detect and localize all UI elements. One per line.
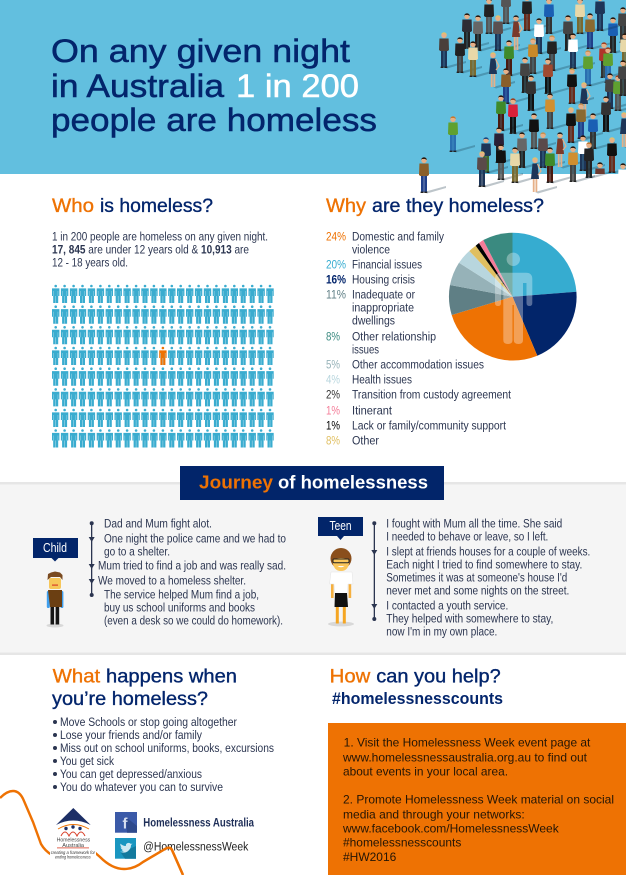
panel: who is homeless (52, 196, 274, 448)
text block: teen story: never met and some nights on the street. (386, 583, 569, 597)
legend: reasons with percentages: Other accommodation issues (352, 358, 484, 372)
panel: child journey (33, 516, 286, 628)
title (51, 33, 377, 138)
text block: teen story: I needed to behave or leave, so I left. (386, 529, 548, 543)
callout: orange action box: about events in your local area. (343, 765, 508, 779)
text: HomelessnessWeek handle: @HomelessnessWeek (143, 842, 249, 854)
chart: pie of homelessness reasons with person overlay (449, 233, 577, 361)
arrow timeline: teen (371, 521, 377, 621)
legend: reasons with percentages: Domestic and family (352, 230, 445, 244)
heading: why are they homeless: Why (326, 196, 367, 217)
list: consequences (53, 715, 274, 794)
legend: reasons with percentages: Health issues (352, 373, 412, 387)
text block: who statistics: 17, 845 are under 12 years old & 10,913 are (52, 243, 249, 257)
legend: reasons with percentages: Inadequate or (352, 288, 415, 302)
heading: how can you help (330, 667, 501, 688)
text: Homelessness Australia: Homelessness Australia (143, 818, 254, 830)
label tag: teen: Teen (330, 519, 352, 533)
callout: orange action box: 1. Visit the Homelessness Week event page at (344, 736, 591, 750)
heading: journey of homelessness banner (180, 466, 444, 500)
text block: teen story: I fought with Mum all the time. She said (386, 516, 562, 530)
text block: teen story: I contacted a youth service. (386, 598, 508, 612)
legend: reasons with percentages: violence (352, 243, 390, 257)
title: 1 in 200 (236, 68, 359, 104)
heading: journey of homelessness banner: Journey (199, 472, 274, 492)
label tag: teen (318, 517, 363, 540)
legend: reasons with percentages: 11% (326, 288, 346, 302)
legend: reasons with percentages: inappropriate (352, 301, 414, 315)
text block: child story (98, 516, 286, 628)
panel: how can you help (328, 667, 626, 875)
text block: teen story: Each night I tried to find somewhere to stay. (386, 557, 582, 571)
logo: Homelessness Australia: Australia (62, 843, 85, 849)
logo: Homelessness Australia (50, 806, 96, 861)
legend: reasons with percentages: 4% (326, 373, 340, 387)
callout: orange action box (328, 723, 626, 875)
callout: orange action box: media and through your networks: (343, 807, 525, 821)
legend: reasons with percentages: 1% (326, 404, 340, 418)
title: people are homeless (51, 102, 377, 138)
legend: reasons with percentages: 8% (326, 329, 340, 343)
legend: reasons with percentages: issues (352, 343, 379, 357)
icon: twitter (115, 838, 136, 859)
icon: facebook: f (122, 816, 128, 832)
heading: what happens: What (53, 667, 101, 688)
icon: translucent person (495, 253, 532, 344)
callout: orange action box: #homelessnesscounts (343, 836, 461, 850)
text block: child story: We moved to a homeless shelter. (98, 573, 246, 587)
logo: Homelessness Australia: ending homelessness (55, 854, 91, 859)
heading: why are they homeless: are they homeless? (372, 196, 544, 217)
legend: reasons with percentages (326, 230, 512, 448)
label tag: child: Child (43, 541, 67, 555)
icon: facebook (115, 812, 137, 833)
panel: journey of homelessness background (0, 482, 626, 655)
hashtag: homelessnesscounts: #homelessnesscounts (332, 690, 503, 708)
label tag: child (33, 538, 78, 562)
curve segment over handle (143, 848, 183, 875)
text block: teen story: They helped with somewhere to stay, (386, 611, 553, 625)
text block: child story: Mum tried to find a job and was really sad. (98, 558, 286, 572)
text block: who statistics: 1 in 200 people are homeless on any given night. (52, 230, 268, 244)
text block: child story: go to a shelter. (104, 544, 170, 558)
heading: how can you help: can you help? (376, 667, 501, 688)
panel: why are they homeless (326, 196, 577, 448)
decorative orange curve (0, 791, 183, 875)
text block: child story: Dad and Mum fight alot. (104, 516, 212, 530)
list: consequences: You get sick (60, 754, 115, 768)
legend: reasons with percentages: Lack or family/community support (352, 419, 507, 433)
text block: teen story: Sometimes it was at someone's house I'd (386, 570, 567, 584)
heading: what happens: you’re homeless? (52, 689, 208, 710)
legend: reasons with percentages: Financial issues (352, 258, 422, 272)
callout: orange action box: #HW2016 (343, 850, 397, 864)
title: On any given night (51, 33, 350, 69)
list: consequences: Lose your friends and/or family (60, 728, 203, 742)
legend: reasons with percentages: 2% (326, 388, 340, 402)
text block: child story: (even a desk so we could do homework). (104, 614, 283, 628)
legend: reasons with percentages: Other relationship (352, 329, 436, 343)
legend: reasons with percentages: Itinerant (352, 404, 393, 418)
list: consequences: Miss out on school uniforms, books, excursions (60, 741, 274, 755)
heading: who is homeless (52, 196, 213, 217)
callout: orange action box: www.homelessnessaustralia.org.au to find out (342, 751, 588, 765)
text block: teen story: now I'm in my own place. (386, 624, 497, 638)
illustration: crowd of people (419, 0, 626, 200)
heading: how can you help: How (330, 667, 371, 688)
legend: reasons with percentages: 8% (326, 434, 340, 448)
legend: reasons with percentages: Transition from custody agreement (352, 388, 512, 402)
title: in Australia (51, 68, 225, 104)
callout: orange action box: www.facebook.com/HomelessnessWeek (342, 821, 559, 835)
legend: reasons with percentages: 20% (326, 258, 346, 272)
heading: what happens (52, 667, 237, 710)
panel: what happens when you're homeless (52, 667, 274, 794)
text block: teen story (386, 516, 590, 638)
legend: reasons with percentages: 16% (326, 273, 346, 287)
text block: child story: The service helped Mum find a job, (104, 588, 259, 602)
legend: reasons with percentages: 24% (326, 230, 346, 244)
legend: reasons with percentages: 1% (326, 419, 340, 433)
text block: child story: One night the police came and we had to (104, 531, 286, 545)
arrow timeline: child (89, 521, 95, 597)
icon: child figure (46, 572, 64, 628)
list: consequences: You can get depressed/anxious (60, 767, 202, 781)
callout: orange action box: 2. Promote Homelessness Week material on social (343, 792, 614, 806)
logo: Homelessness Australia: creating a framework for (51, 850, 96, 855)
legend: reasons with percentages: dwellings (352, 314, 395, 328)
heading: who is homeless: is homeless? (100, 196, 213, 217)
text block: who statistics (52, 230, 268, 270)
heading: what happens: happens when (106, 667, 237, 688)
list: consequences: Move Schools or stop going altogether (60, 715, 237, 729)
panel: teen journey (318, 516, 590, 638)
logo: Homelessness Australia: Homelessness (57, 838, 90, 844)
legend: reasons with percentages: 5% (326, 358, 340, 372)
icon: teen figure (328, 548, 354, 626)
heading: who is homeless: Who (52, 196, 94, 217)
heading: journey of homelessness banner: of homelessness (278, 472, 428, 492)
list: consequences: You do whatever you can to survive (60, 780, 223, 794)
text block: child story: buy us school uniforms and books (104, 601, 255, 615)
chart: pictogram of 200 people with one highlighted (52, 285, 274, 448)
text block: who statistics: 12 - 18 years old. (52, 256, 128, 270)
header background band (0, 0, 626, 174)
legend: reasons with percentages: Other (352, 434, 379, 448)
legend: reasons with percentages: Housing crisis (352, 273, 415, 287)
